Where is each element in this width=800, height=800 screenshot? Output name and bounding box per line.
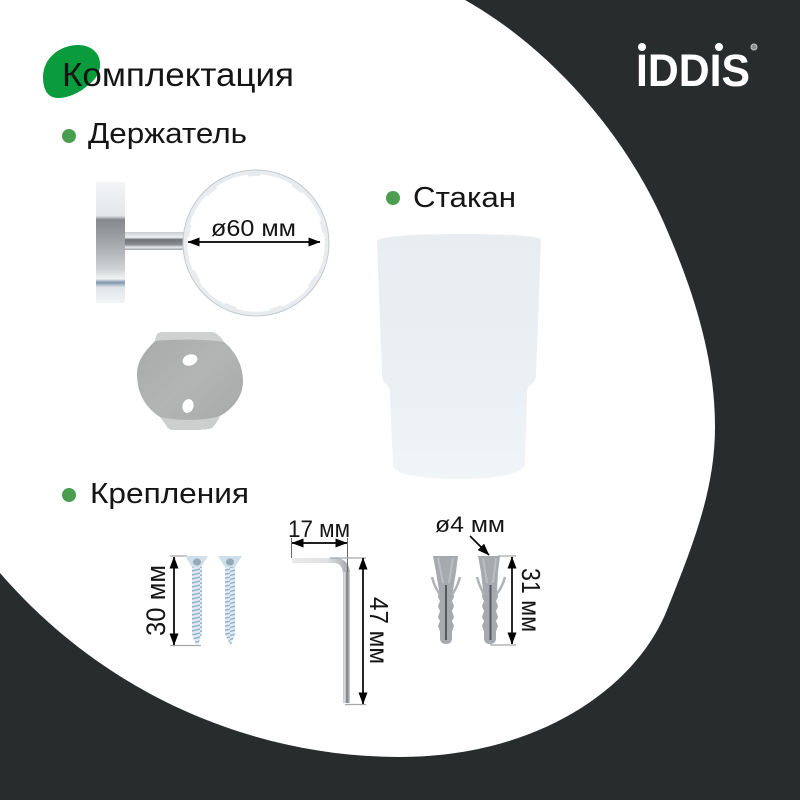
dimension: plug diameter 4 mm: ø4 мм bbox=[435, 512, 505, 537]
frosted glass bbox=[377, 234, 541, 479]
wall plug 2 bbox=[477, 556, 505, 644]
dimension: 60 mm diameter bbox=[188, 215, 320, 242]
dimension: key width 17 mm bbox=[288, 516, 350, 572]
heading: Держатель: Держатель bbox=[88, 118, 247, 150]
dimension: key length 47 mm: 47 мм bbox=[364, 597, 394, 664]
dimension: plug diameter 4 mm bbox=[435, 512, 505, 555]
dimension: screw length 30 mm bbox=[141, 556, 201, 646]
wall plug 1 bbox=[432, 556, 460, 644]
screw 1 bbox=[185, 556, 208, 645]
dimension: 60 mm diameter: ø60 мм bbox=[211, 215, 296, 241]
dimension: screw length 30 mm: 30 мм bbox=[141, 565, 171, 636]
logo: iDDIS: IDDIS bbox=[636, 45, 750, 96]
green title blob bbox=[43, 45, 100, 98]
dimension: plug length 31 mm bbox=[490, 556, 546, 645]
dimension: plug length 31 mm: 31 мм bbox=[516, 568, 546, 632]
title: Комплектация bbox=[62, 56, 294, 93]
holder illustration bbox=[96, 170, 329, 316]
screw 2 bbox=[218, 556, 242, 645]
mounting plate bbox=[137, 332, 243, 430]
dimension: key width 17 mm: 17 мм bbox=[288, 516, 350, 543]
allen key bbox=[292, 558, 350, 703]
heading: Крепления: Крепления bbox=[90, 478, 249, 510]
heading: Стакан: Стакан bbox=[413, 182, 516, 214]
